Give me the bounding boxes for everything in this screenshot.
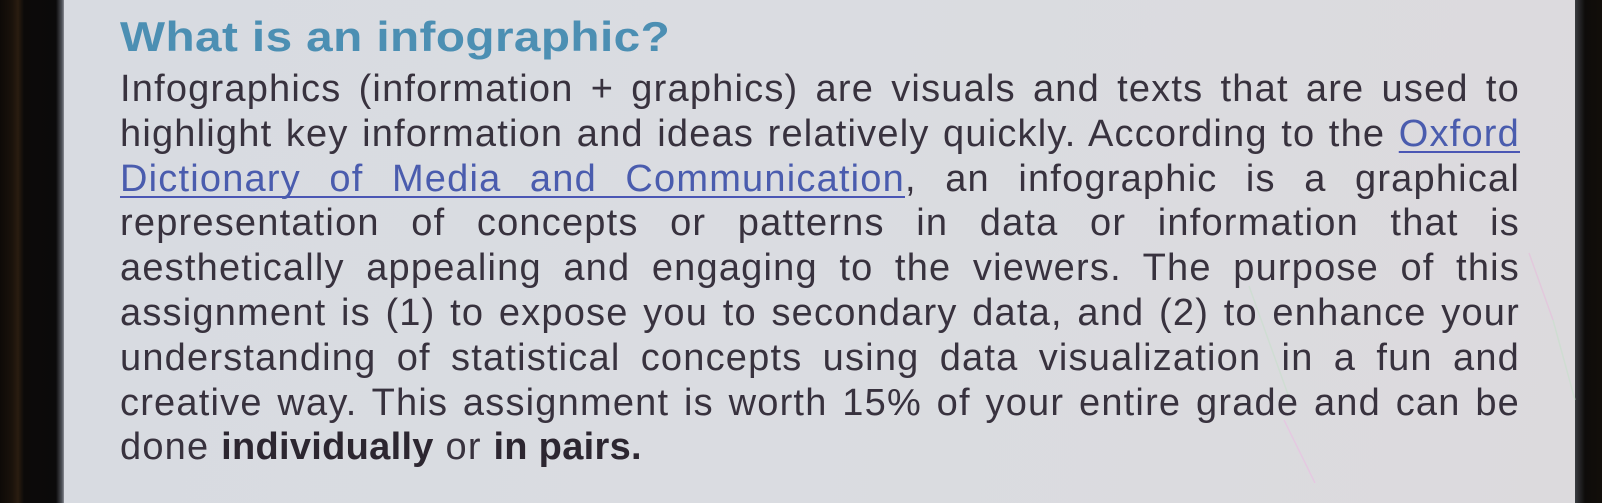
body text block: aesthetically appealing and engaging to the viewers. The purpose of this (120, 247, 1520, 289)
body text block (120, 68, 1520, 468)
body text block: assignment is (1) to expose you to secondary data, and (2) to enhance your (120, 292, 1520, 334)
body text block: representation of concepts or patterns in data or information that is (120, 202, 1520, 244)
body text block: understanding of statistical concepts using data visualization in a fun and (120, 337, 1520, 379)
body text block: Infographics (information + graphics) are visuals and texts that are used to (120, 68, 1520, 110)
body text block: done individually or in pairs. (120, 426, 642, 468)
body text block: highlight key information and ideas relatively quickly. According to the Oxford (120, 113, 1520, 155)
title: What is an infographic? (120, 13, 670, 60)
body text block: Dictionary of Media and Communication, an infographic is a graphical (120, 158, 1520, 200)
body text block: creative way. This assignment is worth 15% of your entire grade and can be (120, 382, 1520, 424)
